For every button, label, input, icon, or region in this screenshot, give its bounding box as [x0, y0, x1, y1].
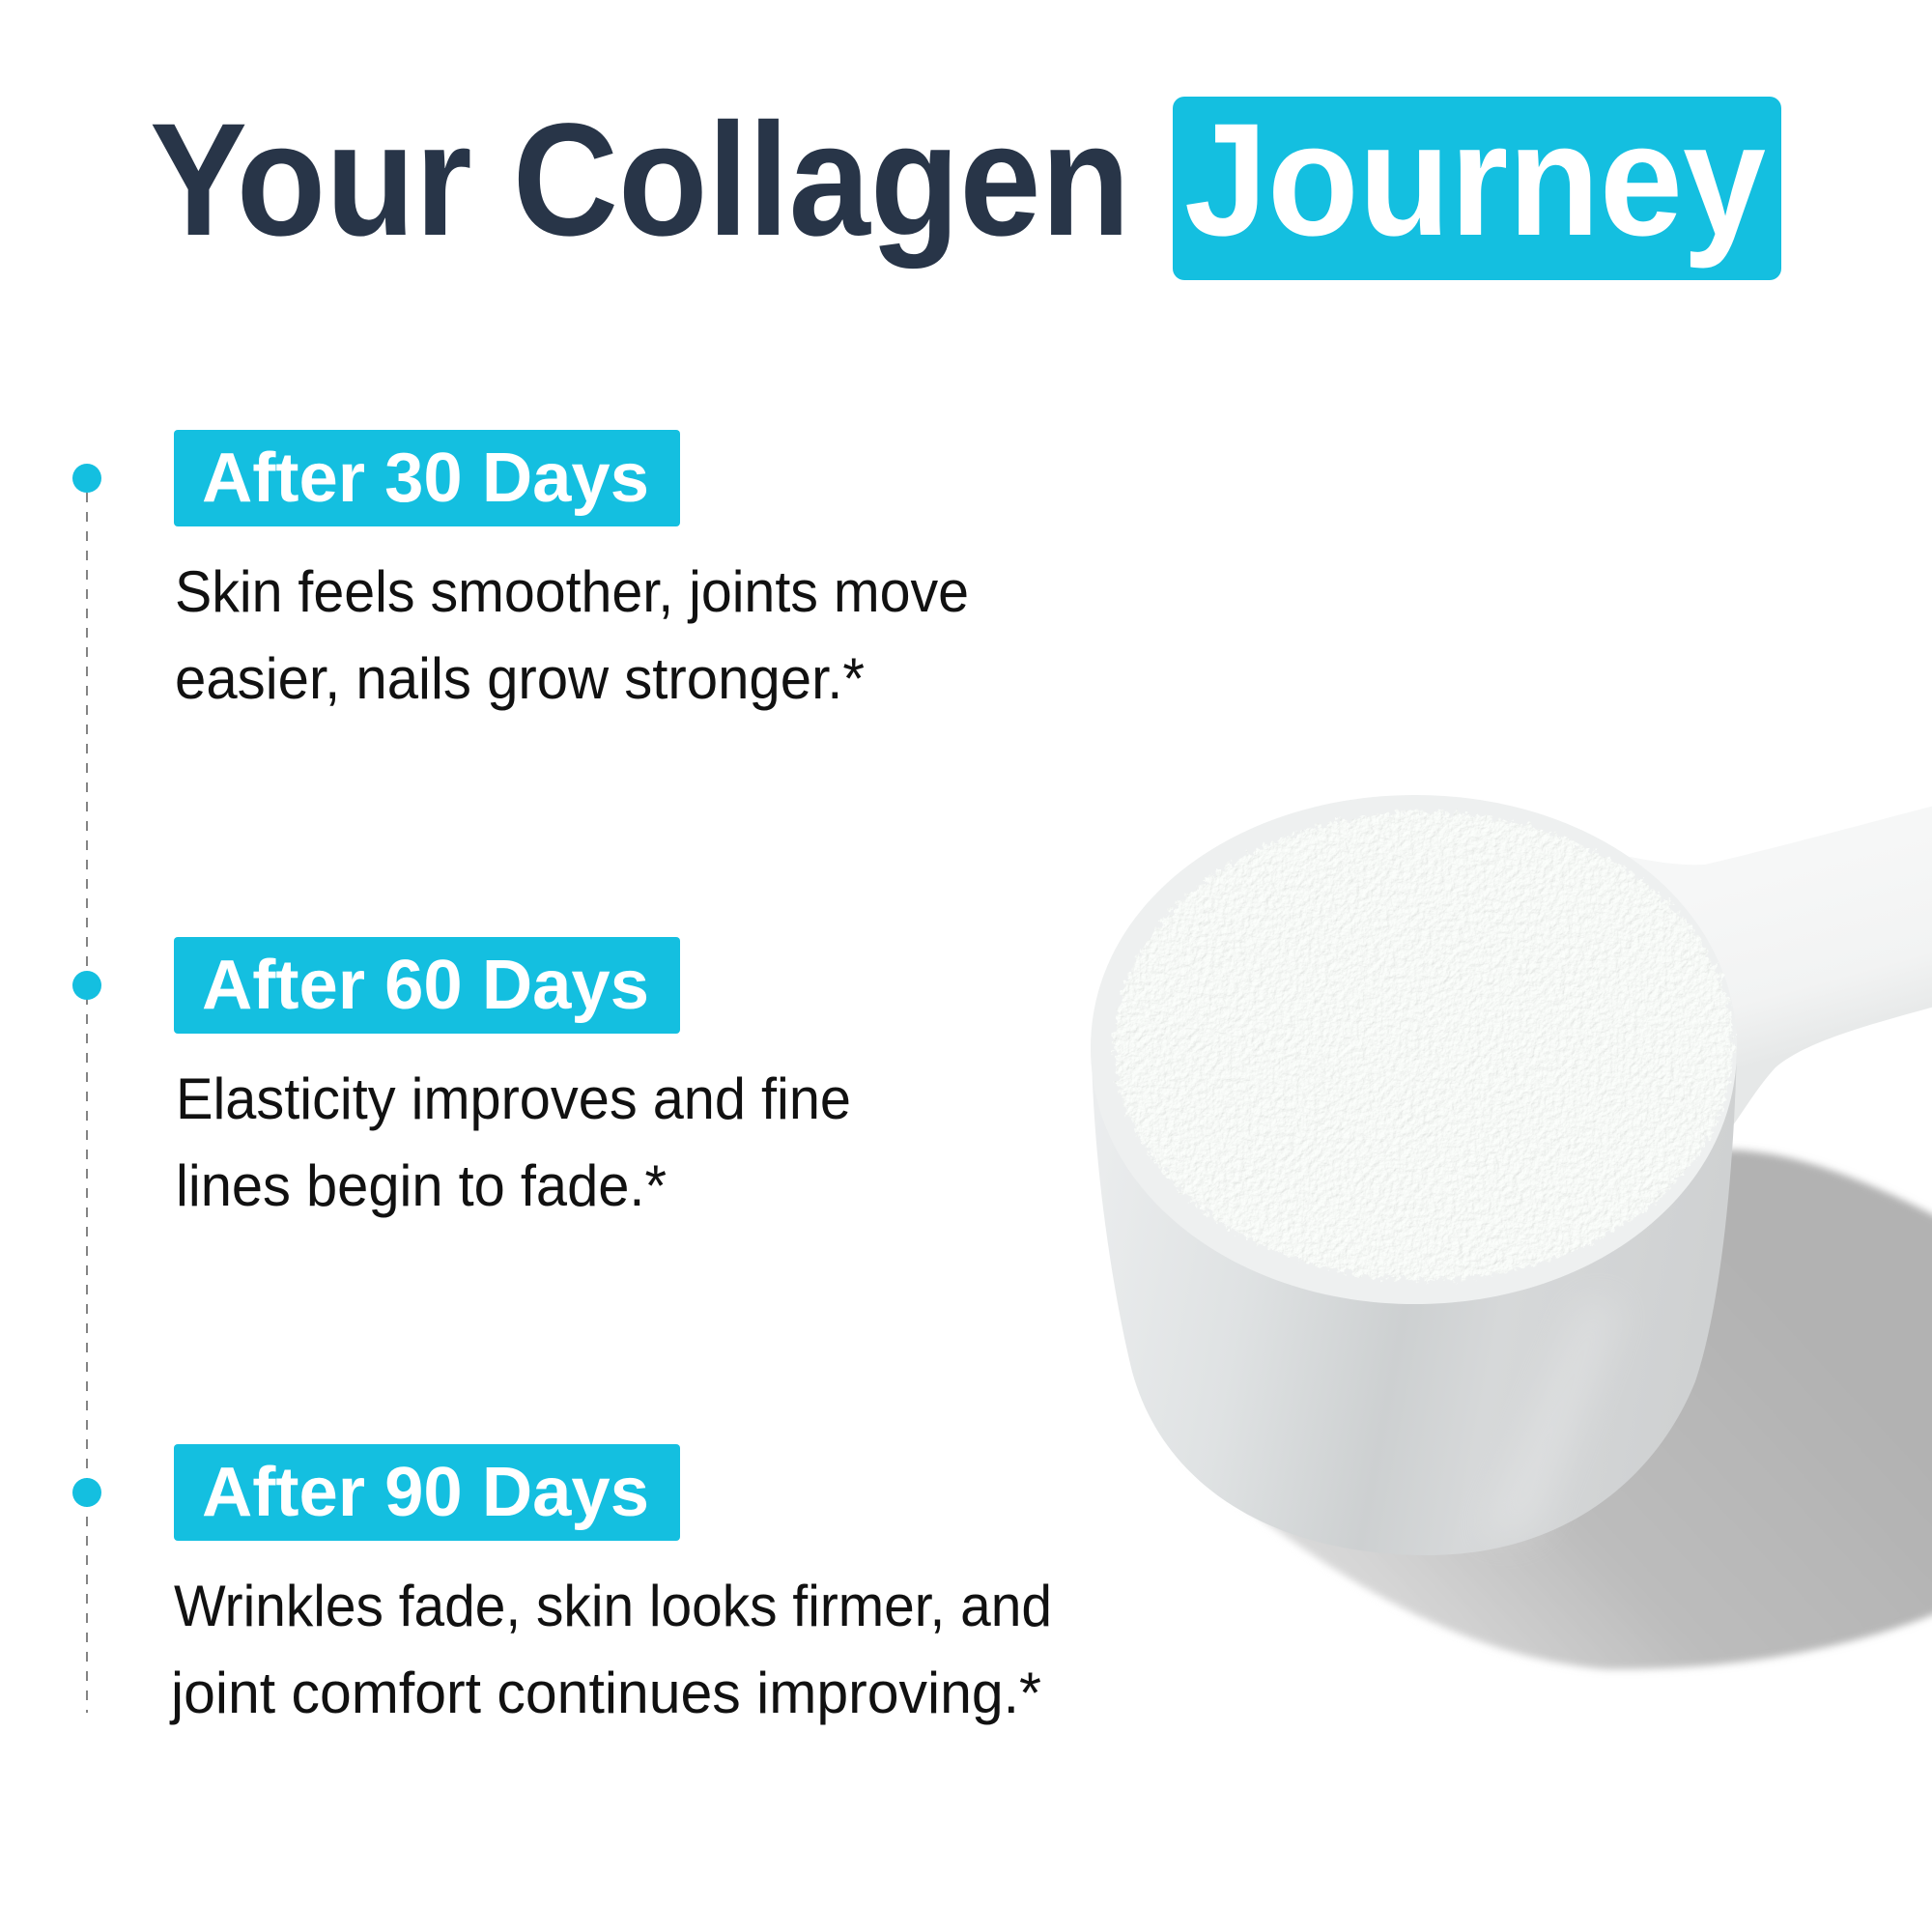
description [175, 559, 969, 711]
cast shadow [1182, 1150, 1932, 1669]
panel: after 60 days [174, 937, 851, 1218]
badge label: After 90 Days [202, 1454, 649, 1531]
title [150, 91, 1781, 280]
description: Wrinkles fade, skin looks firmer, and [174, 1574, 1052, 1638]
body highlight [1478, 1299, 1623, 1541]
badge label: After 60 Days [202, 947, 649, 1024]
powder [1115, 812, 1733, 1280]
highlighted word: Journey [1184, 91, 1766, 270]
description: easier, nails grow stronger.* [175, 646, 865, 711]
description [169, 1574, 1052, 1725]
badge background [174, 430, 680, 526]
marker 60 days [72, 971, 101, 1000]
description [176, 1066, 851, 1218]
marker 90 days [72, 1478, 101, 1507]
timeline [72, 464, 101, 1713]
heading text: Your Collagen [150, 91, 1130, 270]
scoop of collagen powder [1091, 795, 1932, 1669]
badge label: After 30 Days [202, 440, 649, 517]
cup body [1092, 1048, 1737, 1555]
badge background [174, 1444, 680, 1541]
rim [1091, 795, 1737, 1304]
description: lines begin to fade.* [176, 1153, 667, 1218]
highlight box [1173, 97, 1781, 280]
handle [1584, 804, 1932, 1150]
panel: after 30 days [174, 430, 969, 711]
dashed connector [86, 493, 88, 1713]
description: Skin feels smoother, joints move [175, 559, 969, 624]
marker 30 days [72, 464, 101, 493]
description: joint comfort continues improving.* [169, 1661, 1041, 1725]
description: Elasticity improves and fine [176, 1066, 851, 1131]
badge background [174, 937, 680, 1034]
panel: after 90 days [169, 1444, 1052, 1725]
